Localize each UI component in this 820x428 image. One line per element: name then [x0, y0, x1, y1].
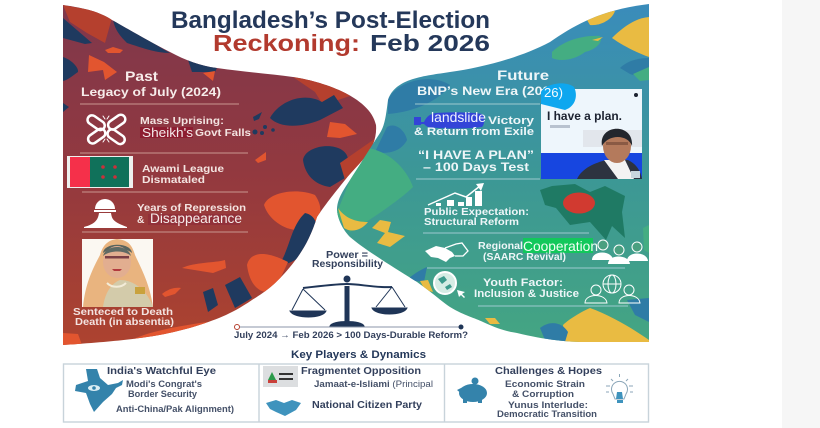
panel: india: Modi's Congrat's [126, 379, 202, 389]
text: 2026: 26) [544, 85, 563, 100]
panel: challenges [457, 366, 633, 419]
title: Feb 2026 [370, 30, 490, 56]
panel: opposition: Jamaat-e-Isliami (Principal [314, 379, 433, 389]
text: youth factor: Youth Factor: [483, 277, 563, 289]
panel: india [75, 366, 234, 414]
icon: youth and globe [585, 275, 640, 303]
icon: light bulb [606, 374, 633, 403]
text: youth factor [474, 277, 579, 300]
text: regional cooperation: (SAARC Revival) [483, 252, 566, 263]
text: regional cooperation: Regional [478, 241, 523, 252]
timeline: July 2024 → Feb 2026 > 100 Days-Durable Reform? [234, 329, 468, 340]
heading: past [81, 69, 221, 99]
text: sentenced: Death (in absentia) [75, 317, 174, 328]
panel: opposition: National Citizen Party [312, 400, 422, 411]
text: public expectation [424, 207, 529, 228]
heading: future: BNP’s New Era (2026) [417, 84, 563, 98]
text: i have a plan: – 100 Days Test [423, 160, 529, 174]
text: repression [137, 203, 246, 226]
icon: globe and cursor [434, 272, 465, 298]
text: awami league: Dismataled [142, 175, 205, 186]
title: Bangladesh’s Post-Election [171, 7, 490, 34]
text: landslide victory: landslide [431, 109, 486, 125]
icon: handshake blue [266, 400, 301, 416]
text: repression: & [137, 215, 145, 226]
icon: jamaat logo [263, 366, 298, 387]
icon: person silhouette [84, 199, 127, 228]
panel: challenges: Democratic Transition [497, 409, 597, 419]
text: sentenced [73, 307, 174, 328]
text: regional cooperation: Cooperation [523, 238, 598, 254]
text: power = responsibility: Responsibility [312, 259, 383, 270]
text: landslide victory [414, 109, 535, 138]
text: landslide victory: & Return from Exile [414, 126, 534, 138]
heading: key players: Key Players & Dynamics [291, 349, 426, 361]
panel: future [336, 4, 649, 343]
text: youth factor: Inclusion & Justice [474, 288, 579, 300]
icon: growth chart [428, 183, 484, 206]
panel: india: Border Security [128, 389, 198, 399]
text: landslide victory: Victory [488, 115, 535, 127]
icon: india map [75, 369, 123, 412]
text: i have a plan: “I HAVE A PLAN” [418, 148, 534, 162]
text: repression: Years of Repression [137, 203, 246, 214]
dividers future [415, 104, 628, 306]
heading: future [417, 68, 563, 98]
title: Reckoning: [213, 30, 360, 56]
text: sentenced: Senteced to Death [73, 307, 173, 318]
panel: india: Anti-China/Pak Alignment) [116, 404, 234, 414]
panel: challenges: Economic Strain [505, 379, 585, 389]
map of Bangladesh [540, 184, 625, 240]
panel: key players table [64, 364, 648, 422]
text: power = responsibility [312, 250, 383, 270]
text: regional cooperation [478, 238, 598, 263]
heading: future: Future [497, 68, 550, 83]
photo: I have a plan poster [541, 89, 642, 179]
panel: challenges: Challenges & Hopes [495, 366, 602, 377]
text: public expectation: Public Expectation: [424, 207, 529, 218]
timeline [234, 324, 468, 340]
highlight: 2026 [541, 83, 576, 110]
title [171, 7, 490, 56]
page side strip [782, 0, 820, 428]
panel: past [63, 5, 376, 345]
panel: india: India's Watchful Eye [107, 366, 216, 377]
text: i have a plan [418, 148, 534, 174]
text: mass uprising [140, 116, 251, 140]
text: awami league: Awami League [142, 164, 224, 175]
panel: challenges: & Corruption [512, 389, 574, 399]
icon: flag [67, 156, 133, 188]
text: power = responsibility: Power = [326, 250, 368, 261]
icon: scales of justice [290, 276, 407, 326]
panel: challenges: Yunus Interlude: [508, 400, 588, 410]
text: mass uprising: Sheikh's [142, 125, 194, 140]
icon: piggy bank [457, 378, 487, 403]
icon: people group [592, 240, 648, 264]
icon: broken chain [86, 113, 127, 146]
divider past [80, 104, 248, 232]
text: mass uprising: Mass Uprising: [140, 116, 224, 127]
heading: past: Legacy of July (2024) [81, 85, 221, 99]
text: mass uprising: Govt Falls [195, 128, 251, 139]
text: repression: Disappearance [150, 211, 242, 226]
panel: opposition: Fragmentet Opposition [301, 366, 421, 377]
photo: I have a plan poster: I have a plan. [547, 111, 622, 123]
portrait [82, 239, 153, 307]
icon: handshake [425, 243, 468, 262]
text: public expectation: Structural Reform [424, 217, 519, 228]
text: awami league [142, 164, 224, 186]
heading: past: Past [125, 69, 159, 84]
panel: opposition [263, 366, 433, 416]
